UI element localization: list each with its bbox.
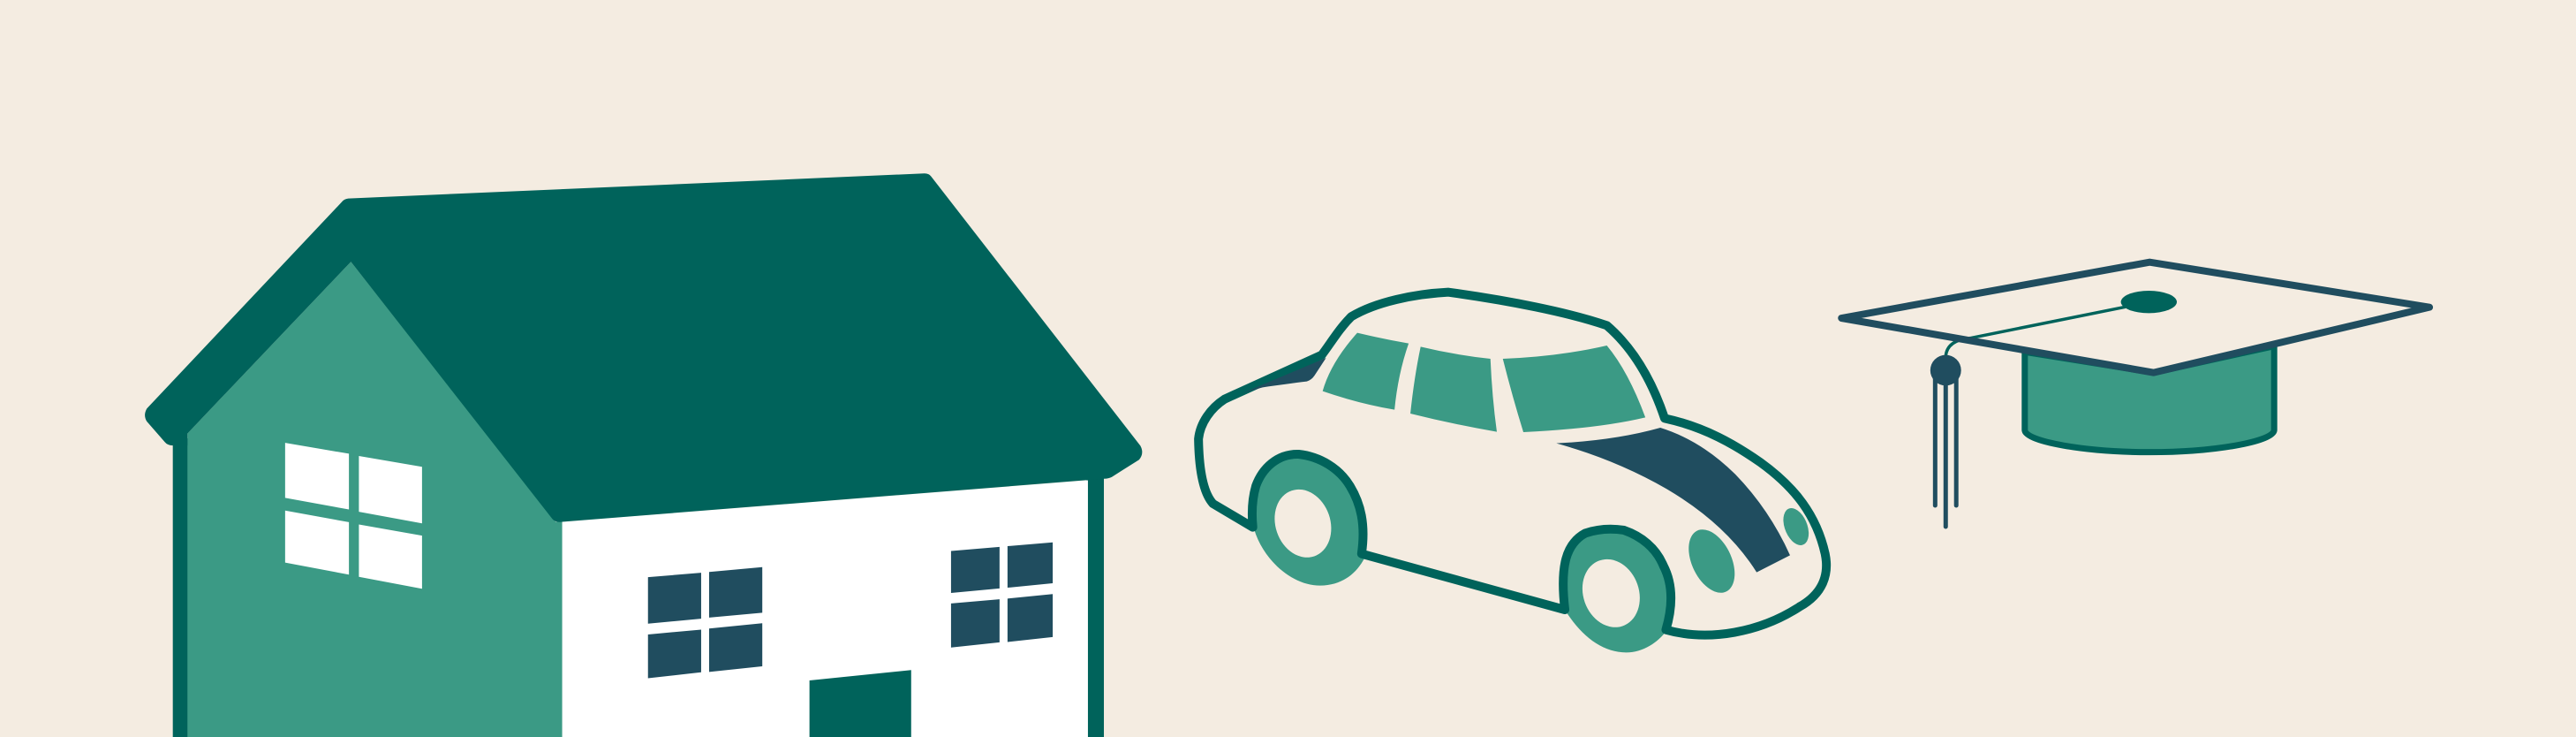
tassel cord [1945,307,2126,356]
car outline [1198,293,1826,635]
cap button [2121,291,2177,313]
windshield [1503,346,1645,432]
front wheel [1563,529,1671,652]
house roof [145,173,1142,522]
rear wheel [1252,454,1366,586]
house front wall [563,481,1088,737]
house right wall edge [1086,475,1104,737]
icon: house [145,173,1142,737]
cap base [2025,346,2274,452]
rear side window [1323,333,1409,410]
rear shadow [1243,358,1326,393]
icon: car [1198,293,1826,652]
house left wall edge [173,438,189,737]
headlight left [1681,527,1743,596]
house side wall [187,262,563,737]
side window [285,443,422,589]
tassel strands [1935,377,1956,527]
front side window [1410,346,1497,432]
front window left [648,567,762,679]
headlight right [1779,506,1813,547]
front window right [951,543,1053,648]
hood stripe [1556,428,1790,573]
door [810,670,911,737]
mortarboard [1841,262,2429,373]
icon: graduation cap [1841,262,2429,527]
tassel knot [1930,355,1961,385]
